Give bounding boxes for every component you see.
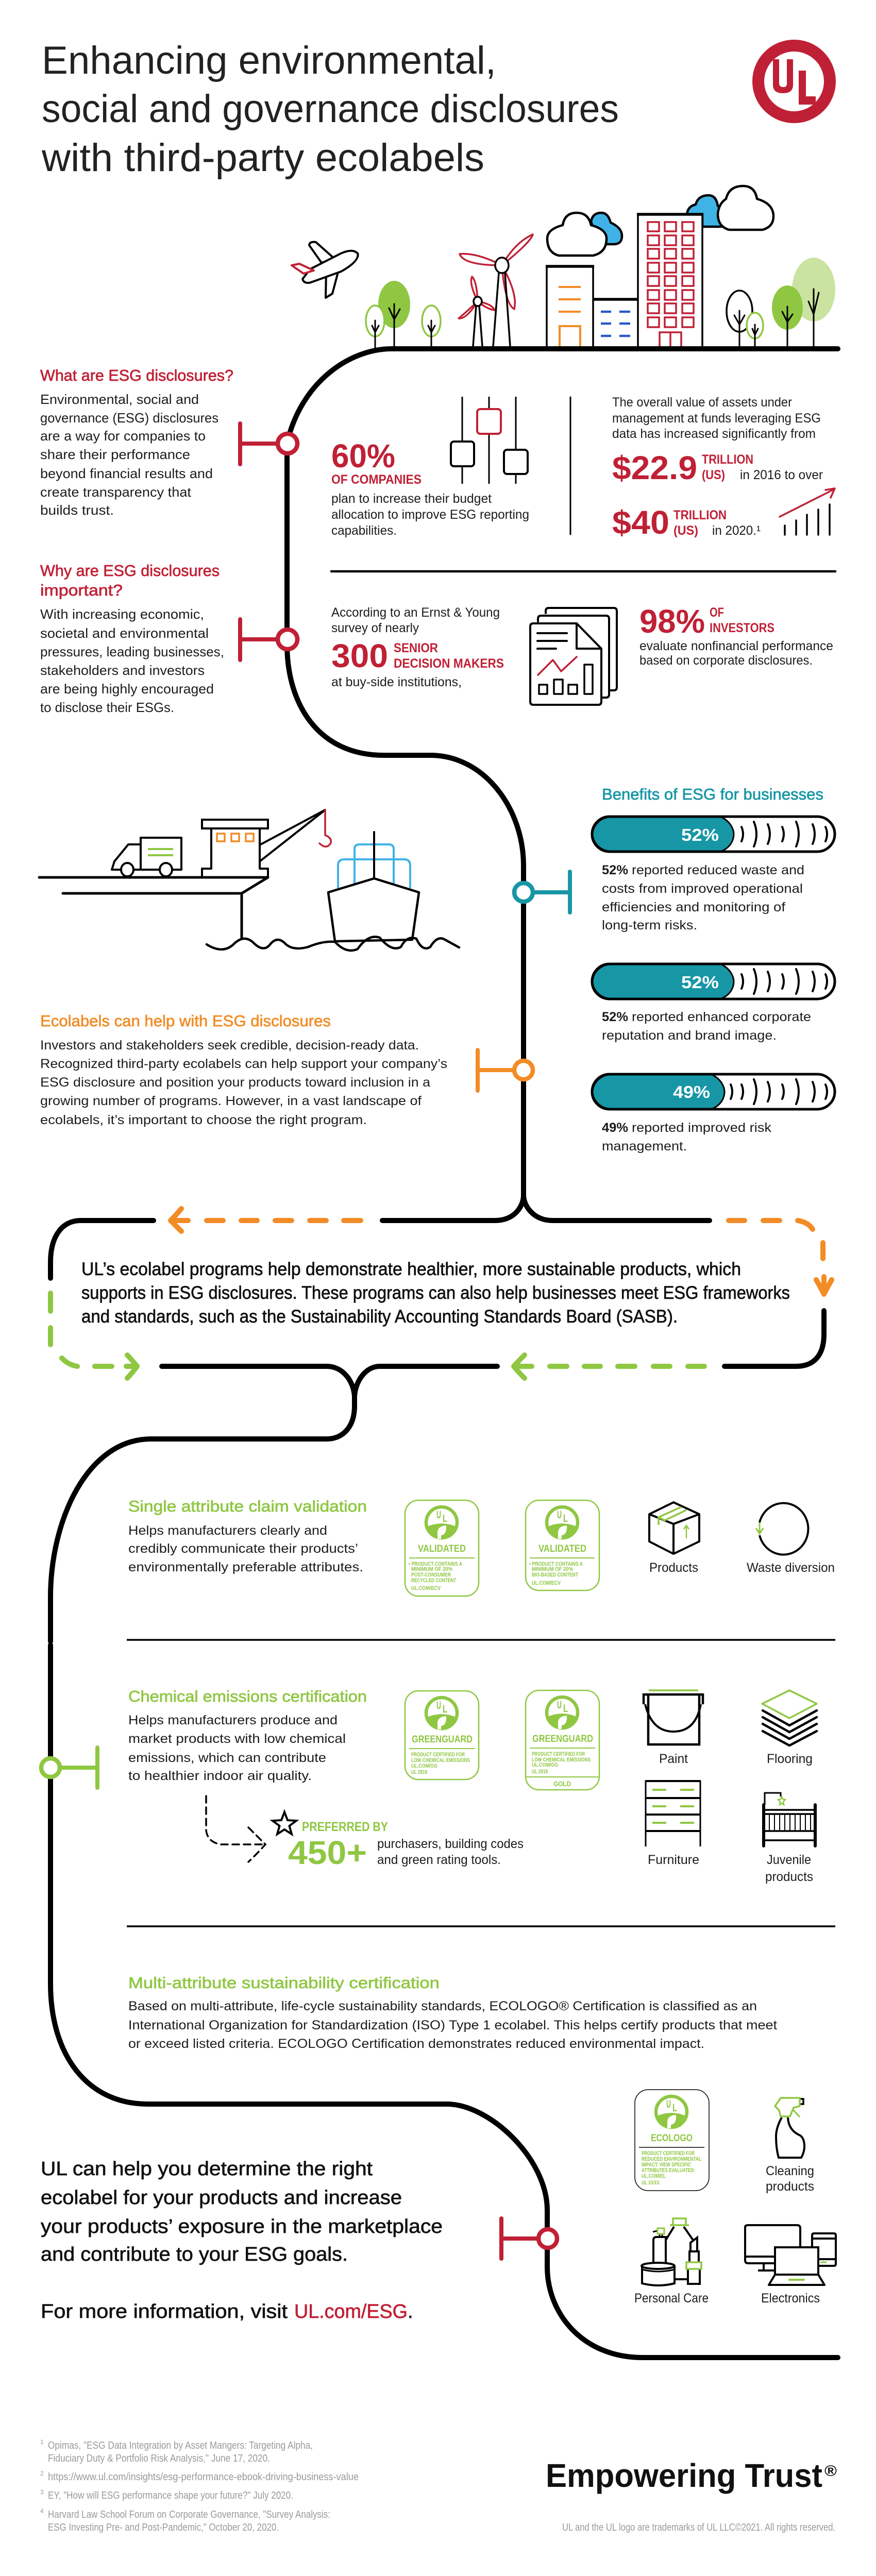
stat: assets under management (612, 395, 823, 541)
icon: right trees (727, 258, 835, 349)
stat: 300 senior decision makers: SENIOR (394, 641, 438, 655)
text: closing call to action: UL can help you determine the right (41, 2158, 373, 2180)
text: what are ESG disclosures: Environmental, social and (40, 392, 199, 407)
icon: furniture: Furniture (648, 1853, 699, 1867)
stat: 300 senior decision makers: DECISION MAKERS (394, 656, 504, 671)
footnotes: ESG Investing Pre- and Post-Pandemic," October 20, 2020. (48, 2522, 279, 2533)
badge: validated bio-based: • PRODUCT CONTAINS A (529, 1561, 583, 1567)
badge: greenguard gold: GREENGUARD (532, 1734, 593, 1744)
stat: assets under management: in 2020.¹ (712, 523, 761, 538)
badge: greenguard: PRODUCT CERTIFIED FOR (411, 1752, 465, 1758)
stat: 60% of companies: plan to increase their budget (331, 492, 492, 506)
caption: 52% reduced waste: costs from improved operational (602, 882, 803, 896)
icon: juvenile products: Juvenile (767, 1853, 811, 1867)
stat: 300 senior decision makers: 300 (331, 637, 388, 674)
text: closing call to action: and contribute to your ESG goals. (41, 2244, 348, 2265)
text: single attribute: credibly communicate their products’ (128, 1541, 358, 1556)
badge: validated recycled: UL.COM/ECV (411, 1585, 441, 1591)
text: closing call to action: For more information, visit (41, 2301, 288, 2323)
text: chemical emissions: emissions, which can contribute (128, 1751, 326, 1765)
icon: electronics: Electronics (761, 2291, 820, 2306)
badge: greenguard gold: UL 2818 (532, 1769, 548, 1775)
text: why are ESG disclosures important: societal and environmental (40, 625, 209, 641)
badge: validated recycled (405, 1500, 479, 1596)
stat: assets under management: (US) (673, 523, 698, 538)
marker: chemical (41, 1748, 97, 1788)
caption: 49% risk (602, 1121, 772, 1154)
icon: clouds (547, 186, 773, 256)
badge: greenguard gold: PRODUCT CERTIFIED FOR (532, 1751, 585, 1757)
text: what are ESG disclosures: share their performance (40, 447, 190, 462)
badge: greenguard (405, 1691, 479, 1780)
text: why are ESG disclosures important (40, 562, 224, 715)
stat: 60% of companies: capabilities. (331, 523, 397, 538)
title (41, 39, 619, 180)
badge: greenguard: L (443, 1703, 447, 1715)
stat: 300 senior decision makers: at buy-side institutions, (331, 675, 462, 689)
footnotes: Harvard Law School Forum on Corporate Governance, "Survey Analysis: (48, 2509, 330, 2520)
text: multi-attribute: Multi-attribute sustainability certification (128, 1974, 440, 1992)
badge: greenguard gold (526, 1690, 599, 1790)
footnotes: 4 (40, 2507, 44, 2515)
caption: 52% reputation: reputation and brand image. (602, 1028, 777, 1043)
text: why are ESG disclosures important: With increasing economic, (40, 606, 204, 622)
badge: ecologo: ECOLOGO (651, 2133, 693, 2144)
stat: 98% of investors (639, 603, 833, 668)
badge: ecologo: L (672, 2102, 677, 2114)
stat: 98% of investors: based on corporate disclosures. (639, 653, 813, 668)
text: ecolabels can help: Ecolabels can help with ESG disclosures (40, 1012, 331, 1030)
logo: UL (759, 45, 830, 117)
bar: 52% reduced waste: 52% (681, 825, 719, 844)
main path line (50, 349, 838, 2358)
marker: ecolabels (478, 1050, 533, 1091)
callout: UL ecolabel programs: UL’s ecolabel programs help demonstrate healthier, more sustainable products, which (81, 1259, 741, 1279)
text: closing call to action: UL.com/ESG (294, 2301, 408, 2323)
tagline: Empowering Trust: Empowering Trust (546, 2457, 822, 2494)
badge: ecologo (635, 2090, 709, 2191)
text: single attribute: environmentally preferable attributes. (128, 1560, 363, 1574)
title: Enhancing environmental, (42, 39, 496, 82)
stat: assets under management: management at funds leveraging ESG (612, 411, 821, 426)
tagline: Empowering Trust: ® (824, 2463, 837, 2480)
badge: greenguard: UL.COM/GG (411, 1763, 437, 1769)
icon: waste diversion (747, 1503, 835, 1575)
caption: 52% reputation: reported enhanced corporate (632, 1010, 811, 1024)
dashed arrows: orange (171, 1209, 832, 1294)
icon: products box: Products (649, 1561, 698, 1575)
text: closing call to action: . (408, 2301, 413, 2323)
stat: assets under management: data has increased significantly from (612, 427, 816, 441)
icon: growth chart (780, 488, 835, 535)
text: what are ESG disclosures: are a way for companies to (40, 428, 206, 444)
footnotes (40, 2438, 359, 2533)
text: single attribute: Helps manufacturers clearly and (128, 1523, 327, 1538)
footnotes: Opimas, "ESG Data Integration by Asset Mangers: Targeting Alpha, (48, 2440, 313, 2451)
icon: cleaning products: products (766, 2179, 814, 2194)
icon: waves (207, 937, 459, 951)
footnotes: https://www.ul.com/insights/esg-performance-ebook-driving-business-value (48, 2471, 359, 2483)
icon: paint: Paint (659, 1752, 688, 1766)
stat: preferred by 450+ (288, 1820, 524, 1871)
icon: left trees (366, 281, 441, 349)
text: what are ESG disclosures: governance (ESG) disclosures (40, 410, 218, 426)
caption: 52% reduced waste: 52% (602, 863, 628, 877)
stat: assets under management: The overall value of assets under (612, 395, 792, 410)
stat: preferred by 450+: purchasers, building codes (377, 1837, 524, 1851)
icon: juvenile products: products (765, 1870, 813, 1884)
panel: benefits of ESG: Benefits of ESG for businesses (602, 785, 823, 803)
text: chemical emissions: Helps manufacturers produce and (128, 1713, 338, 1727)
badge: greenguard gold: U (557, 1699, 562, 1711)
icon: star (273, 1812, 296, 1834)
text: ecolabels can help: Recognized third-party ecolabels can help support your company’s (40, 1057, 447, 1071)
badge: greenguard: UL 2818 (411, 1769, 427, 1775)
bar: 52% reduced waste (592, 817, 835, 852)
caption: 49% risk: 49% (602, 1121, 628, 1135)
icon: sliders (451, 397, 528, 484)
badge: ecologo: REDUCED ENVIRONMENTAL (642, 2156, 701, 2162)
bar: 52% reputation (592, 964, 835, 999)
text: what are ESG disclosures: builds trust. (40, 502, 114, 518)
text: what are ESG disclosures: beyond financial results and (40, 466, 213, 481)
stat: assets under management: $22.9 (612, 449, 697, 486)
text: what are ESG disclosures (40, 366, 233, 518)
caption: 49% risk: reported improved risk (632, 1121, 772, 1135)
marker: closing (501, 2218, 557, 2259)
badge: greenguard gold: L (563, 1703, 568, 1715)
callout: UL ecolabel programs: and standards, such as the Sustainability Accounting Standards Board (SASB). (81, 1307, 678, 1327)
text: what are ESG disclosures: create transparency that (40, 484, 192, 500)
stat: assets under management: (US) (702, 468, 725, 482)
badge: ecologo: PRODUCT CERTIFIED FOR (642, 2150, 695, 2157)
stat: 60% of companies: allocation to improve ESG reporting (331, 507, 529, 522)
badge: validated bio-based: UL.COM/ECV (532, 1580, 561, 1586)
stat: 60% of companies: 60% (331, 437, 395, 474)
caption: 52% reduced waste: reported reduced waste and (632, 863, 804, 877)
badge: validated recycled: VALIDATED (418, 1544, 466, 1554)
text: ecolabels can help (40, 1012, 447, 1127)
stat: 60% of companies (331, 437, 529, 538)
icon: buildings (546, 214, 703, 349)
icon: wind turbines (459, 234, 533, 346)
text: single attribute: Single attribute claim validation (128, 1497, 367, 1515)
badge: ecologo: ATTRIBUTES EVALUATED: (642, 2167, 695, 2174)
bar: 49% risk (592, 1074, 835, 1109)
badge: greenguard gold: UL.COM/GG (532, 1762, 558, 1768)
stat: preferred by 450+: and green rating tools. (377, 1853, 501, 1867)
icon: dock (39, 877, 268, 938)
text: chemical emissions: market products with low chemical (128, 1732, 346, 1746)
icon: personal care (634, 2218, 709, 2306)
caption: 52% reduced waste: long-term risks. (602, 918, 697, 933)
badge: validated bio-based: MINIMUM OF 20% (532, 1566, 573, 1572)
arrow: dashed to preferred by (206, 1796, 265, 1862)
text: why are ESG disclosures important: are being highly encouraged (40, 681, 214, 697)
icon: paint (644, 1690, 703, 1766)
footnotes: 2 (40, 2470, 44, 2477)
badge: validated recycled: RECYCLED CONTENT (411, 1578, 456, 1584)
footnotes: 3 (40, 2488, 44, 2496)
callout: UL ecolabel programs: supports in ESG disclosures. These programs can also help businesses meet ESG frameworks (81, 1283, 790, 1303)
text: multi-attribute: Based on multi-attribute, life-cycle sustainability standards, ECOLOGO® Certification is classified as an (128, 1999, 757, 2013)
caption: 52% reputation (602, 1010, 811, 1043)
bar: 49% risk: 49% (673, 1082, 710, 1101)
icon: truck (112, 838, 181, 876)
badge: validated bio-based: VALIDATED (538, 1544, 586, 1554)
caption: 52% reduced waste: efficiencies and monitoring of (602, 900, 785, 914)
icon: juvenile products (764, 1793, 815, 1884)
divider (127, 1639, 835, 1641)
marker: benefits (514, 872, 570, 912)
badge: greenguard: GREENGUARD (412, 1734, 473, 1745)
icon: cleaning products: Cleaning (766, 2164, 814, 2178)
badge: validated bio-based (526, 1500, 599, 1590)
badge: validated bio-based: L (563, 1513, 568, 1524)
badge: ecologo: UL.COM/EL (642, 2173, 666, 2179)
text: why are ESG disclosures important: stakeholders and investors (40, 663, 205, 678)
badge: validated recycled: U (436, 1509, 441, 1521)
text: why are ESG disclosures important: Why are ESG disclosures (40, 562, 220, 580)
icon: furniture (646, 1781, 700, 1867)
stat: preferred by 450+: PREFERRED BY (302, 1820, 388, 1834)
text: ecolabels can help: ESG disclosure and position your products toward inclusion in a (40, 1075, 430, 1090)
stat: 300 senior decision makers: According to an Ernst & Young (331, 605, 500, 620)
stat: 60% of companies: OF COMPANIES (331, 472, 422, 487)
text: chemical emissions: Chemical emissions certification (128, 1687, 367, 1705)
icon: electronics (745, 2225, 836, 2306)
footnotes: 1 (40, 2438, 44, 2446)
footnotes: Fiduciary Duty & Portfolio Risk Analysis," June 17, 2020. (48, 2453, 270, 2464)
illustration: dock, truck and ship (39, 810, 459, 951)
bar: 52% reputation: 52% (681, 973, 719, 992)
stat: assets under management: TRILLION (673, 508, 727, 522)
text: chemical emissions: to healthier indoor air quality. (128, 1769, 312, 1783)
text: multi-attribute: or exceed listed criteria. ECOLOGO Certification demonstrates reduced environmental impact. (128, 2037, 704, 2051)
icon: waste diversion: Waste diversion (747, 1561, 835, 1575)
stat: 98% of investors: OF (710, 605, 724, 620)
panel: benefits of ESG (592, 785, 835, 1154)
badge: validated recycled: POST-CONSUMER (411, 1572, 451, 1578)
illustration: city skyline (292, 186, 835, 349)
badge: validated recycled: • PRODUCT CONTAINS A (409, 1561, 462, 1567)
icon: personal care: Personal Care (634, 2291, 709, 2306)
icon: airplane (292, 242, 361, 298)
badge: ecologo: U (666, 2098, 671, 2110)
icon: flooring (762, 1690, 817, 1766)
icon: cleaning products (766, 2098, 814, 2194)
badge: ecologo: IMPACT. VIEW SPECIFIC (642, 2162, 691, 2168)
text: ecolabels can help: growing number of programs. However, in a vast landscape of (40, 1094, 422, 1108)
text: what are ESG disclosures: What are ESG disclosures? (40, 366, 233, 384)
title: social and governance disclosures (42, 87, 619, 131)
marker: why ESG (240, 619, 297, 660)
stat: 98% of investors: evaluate nonfinancial performance (639, 639, 833, 653)
icon: flooring: Flooring (767, 1752, 813, 1766)
text: closing call to action (41, 2158, 443, 2323)
marker: what are ESG (240, 423, 297, 464)
stat: assets under management: TRILLION (702, 452, 753, 467)
callout: UL ecolabel programs (81, 1259, 790, 1327)
divider (570, 397, 571, 534)
badge: greenguard gold: GOLD (553, 1780, 571, 1788)
stat: preferred by 450+: 450+ (288, 1834, 367, 1871)
text: ecolabels can help: ecolabels, it’s important to choose the right program. (40, 1113, 367, 1127)
caption: 52% reduced waste (602, 863, 804, 933)
badge: validated recycled: MINIMUM OF 20% (411, 1566, 452, 1572)
badge: validated bio-based: U (557, 1509, 562, 1521)
dashed arrows: green (50, 1293, 704, 1378)
text: why are ESG disclosures important: important? (40, 581, 123, 599)
badge: greenguard: U (436, 1700, 441, 1711)
caption: 52% reputation: 52% (602, 1010, 628, 1024)
icon: crane tower (202, 810, 331, 877)
text: multi-attribute: International Organization for Standardization (ISO) Type 1 ecolabel. This helps certify products that meet (128, 2018, 777, 2032)
divider (331, 570, 835, 572)
text: why are ESG disclosures important: pressures, leading businesses, (40, 644, 224, 659)
badge: greenguard: LOW CHEMICAL EMISSIONS (411, 1757, 470, 1764)
badge: validated recycled: L (443, 1513, 447, 1524)
title: with third-party ecolabels (41, 136, 484, 180)
stat: 300 senior decision makers (331, 605, 504, 689)
text: ecolabels can help: Investors and stakeholders seek credible, decision-ready data. (40, 1038, 419, 1053)
stat: 300 senior decision makers: survey of nearly (331, 621, 419, 635)
badge: validated bio-based: BIO-BASED CONTENT (532, 1572, 578, 1578)
icon: ship (328, 832, 419, 941)
stat: assets under management: $40 (612, 504, 669, 541)
badge: greenguard gold: LOW CHEMICAL EMISSIONS (532, 1757, 591, 1763)
badge: ecologo: UL XXXX (642, 2180, 660, 2186)
text: closing call to action: ecolabel for your products and increase (41, 2187, 402, 2209)
text: chemical emissions (128, 1687, 367, 1783)
text: closing call to action: your products’ exposure in the marketplace (41, 2216, 443, 2238)
text: why are ESG disclosures important: to disclose their ESGs. (40, 700, 174, 715)
text: multi-attribute (128, 1974, 777, 2051)
text: single attribute (128, 1497, 367, 1574)
footnotes: EY, "How will ESG performance shape your future?" July 2020. (48, 2490, 293, 2501)
stat: assets under management: in 2016 to over (740, 468, 823, 482)
stat: 98% of investors: 98% (639, 603, 705, 640)
caption: 49% risk: management. (602, 1139, 687, 1154)
stat: 98% of investors: INVESTORS (710, 621, 774, 635)
divider (127, 1925, 835, 1927)
icon: documents (530, 608, 617, 705)
icon: products box (649, 1502, 699, 1575)
